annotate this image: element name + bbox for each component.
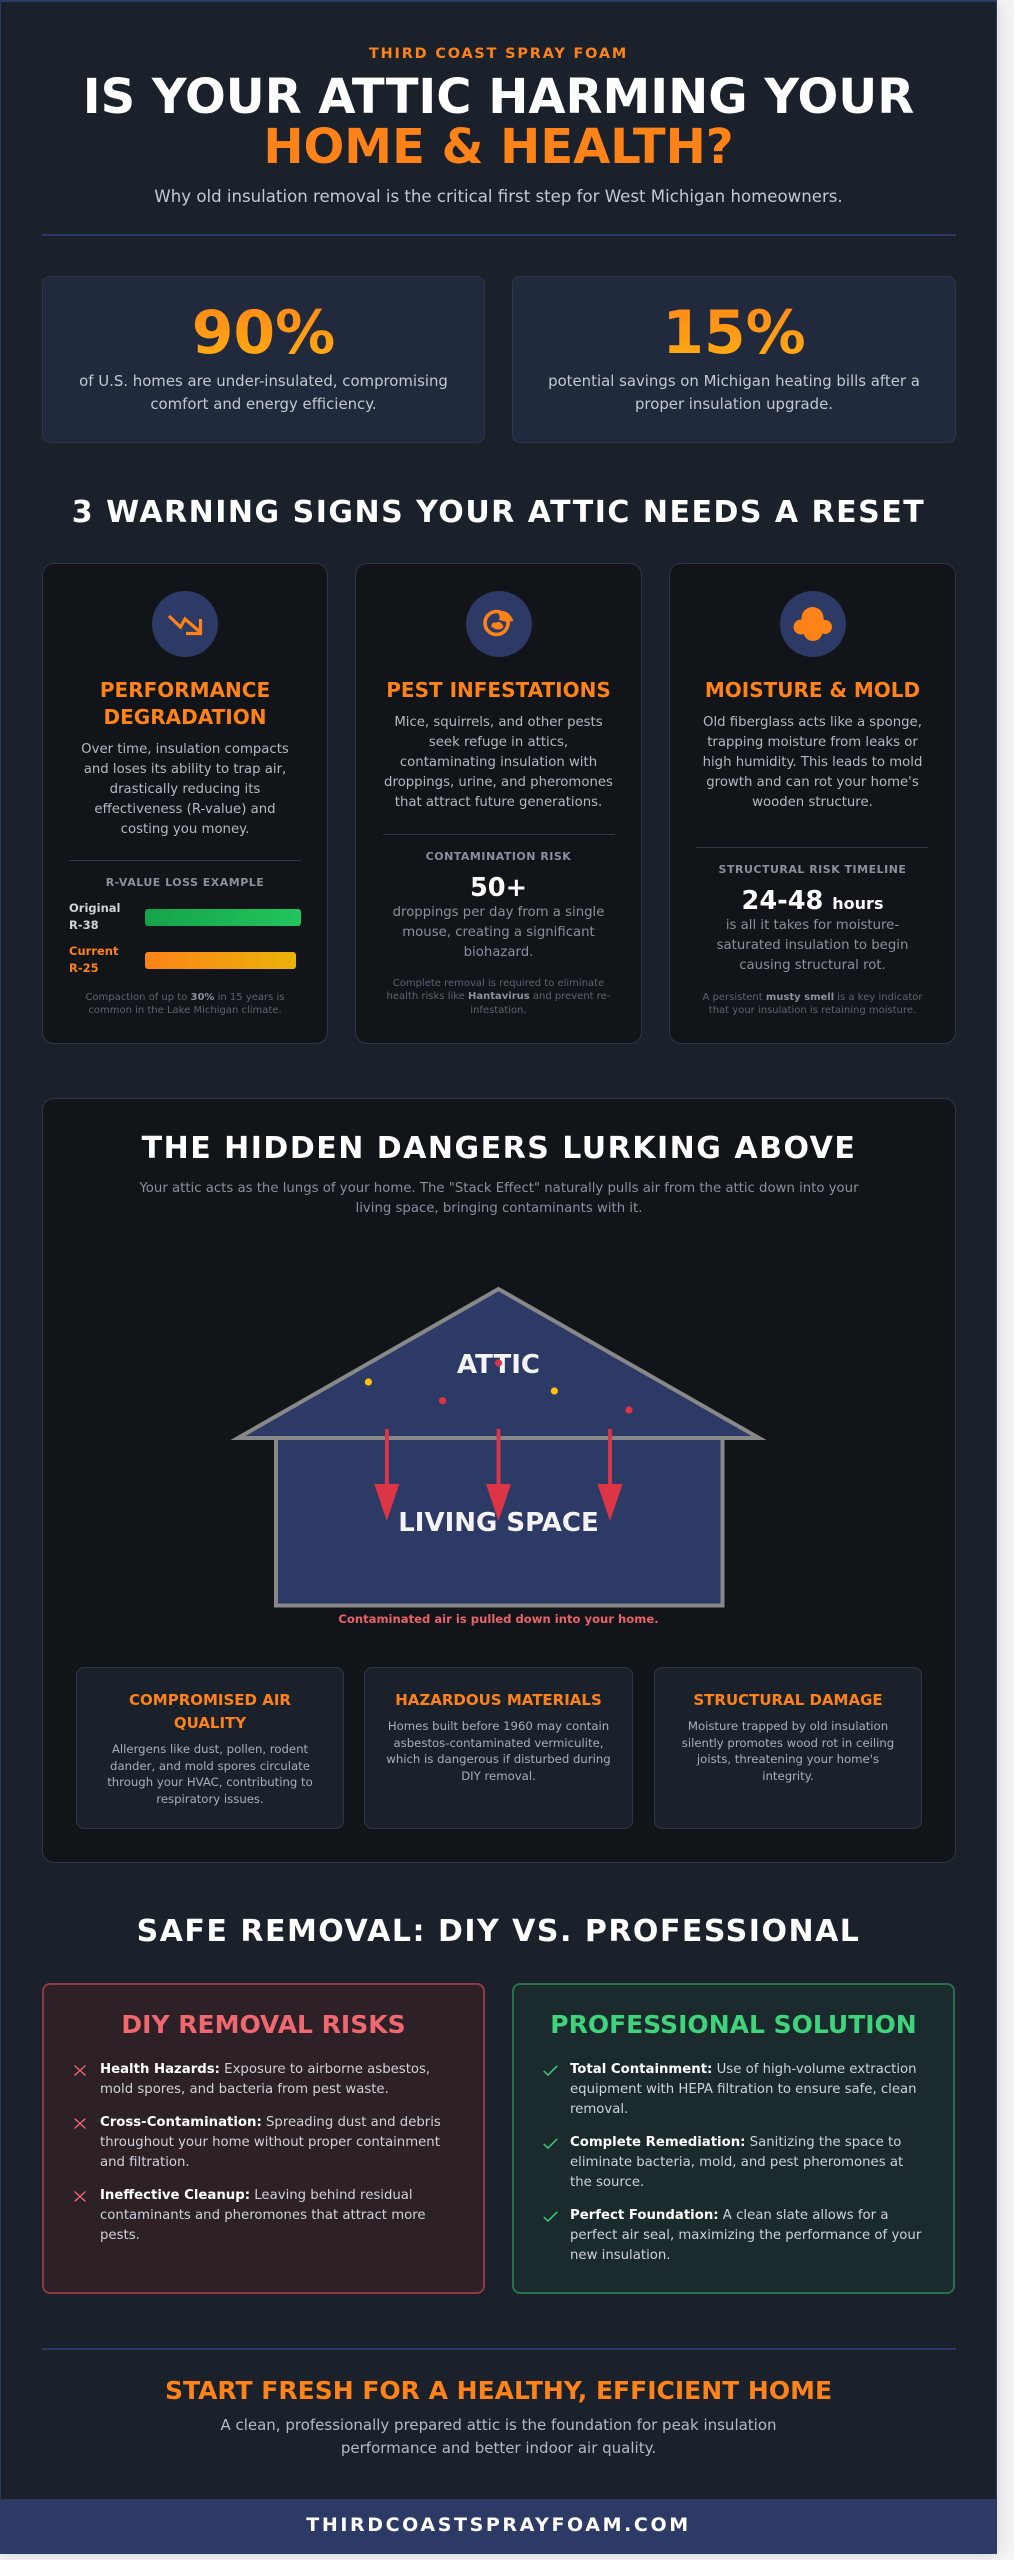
danger card: structural damage — [654, 1667, 922, 1829]
solution list — [543, 2062, 922, 2263]
section intro: living space, bringing contaminants with it. — [356, 1201, 642, 1216]
danger text — [386, 1719, 611, 1783]
risk: cross contamination: and filtration. — [100, 2155, 190, 2170]
danger text: dander, and mold spores circulate — [110, 1759, 310, 1773]
stat caption: causing structural rot. — [739, 958, 886, 973]
card text — [703, 715, 922, 810]
solution: total containment: equipment with HEPA filtration to ensure safe, clean — [570, 2082, 917, 2097]
solution: total containment — [570, 2062, 917, 2117]
call to action text: A clean, professionally prepared attic is the foundation for peak insulation — [220, 2416, 777, 2434]
card note: Complete removal is required to eliminate — [393, 978, 604, 989]
subtitle: Why old insulation removal is the critical first step for West Michigan homeowners. — [154, 187, 843, 206]
panel title: DIY REMOVAL RISKS — [121, 2010, 406, 2039]
section intro — [139, 1181, 859, 1216]
danger text: which is dangerous if disturbed during — [386, 1752, 611, 1766]
living space — [276, 1438, 722, 1606]
card note: health risks like Hantavirus and prevent re- — [387, 991, 610, 1002]
danger text — [682, 1719, 894, 1783]
card text: Mice, squirrels, and other pests — [394, 715, 603, 730]
icon: x — [74, 2118, 86, 2129]
risk: ineffective cleanup: contaminants and pheromones that attract more — [100, 2208, 426, 2223]
stat description: comfort and energy efficiency. — [150, 395, 377, 413]
stat description: of U.S. homes are under-insulated, compromising — [79, 372, 448, 390]
stat description: potential savings on Michigan heating bills after a — [548, 372, 920, 390]
card text: Over time, insulation compacts — [81, 742, 289, 757]
card title: PERFORMANCE — [100, 678, 270, 702]
card text: droppings, urine, and pheromones — [384, 775, 613, 790]
panel: DIY risks — [42, 1983, 485, 2294]
stat value: 50+ — [470, 873, 527, 903]
card title: PEST INFESTATIONS — [386, 678, 611, 702]
section intro: Your attic acts as the lungs of your home. The "Stack Effect" naturally pulls air from the attic down into your — [139, 1181, 859, 1196]
danger card: air quality — [76, 1667, 344, 1829]
label: current — [69, 944, 118, 975]
title: IS YOUR ATTIC HARMING YOUR — [83, 69, 914, 125]
call to action text — [0, 2414, 997, 2461]
icon: x — [74, 2065, 86, 2076]
card title: DEGRADATION — [104, 705, 266, 729]
risk: ineffective cleanup — [100, 2188, 426, 2243]
call to action text: performance and better indoor air quality. — [341, 2439, 656, 2457]
card text: contaminating insulation with — [400, 755, 597, 770]
card text: costing you money. — [121, 822, 249, 837]
living space label: LIVING SPACE — [398, 1508, 599, 1538]
roof attic — [238, 1289, 759, 1438]
icon: x — [74, 2191, 86, 2202]
arrow: center — [486, 1429, 511, 1521]
danger text: integrity. — [762, 1769, 814, 1783]
stat caption — [393, 905, 604, 960]
stat description: proper insulation upgrade. — [635, 395, 833, 413]
danger title: QUALITY — [174, 1714, 246, 1732]
icon: check — [543, 2211, 558, 2222]
arrow: left — [374, 1429, 399, 1521]
label: current: Current — [69, 944, 118, 958]
card text: effectiveness (R-value) and — [94, 802, 276, 817]
card text: and loses its ability to trap air, — [84, 762, 286, 777]
danger text: Moisture trapped by old insulation — [688, 1719, 888, 1733]
solution: perfect foundation: perfect air seal, maximizing the performance of your — [570, 2228, 921, 2243]
stat card: 15% — [512, 276, 956, 443]
solution: complete remediation: the source. — [570, 2175, 644, 2190]
stat caption: droppings per day from a single — [393, 905, 604, 920]
card text: high humidity. This leads to mold — [703, 755, 922, 770]
footer bar — [0, 2499, 997, 2554]
panel title: PROFESSIONAL SOLUTION — [550, 2010, 917, 2039]
label: original: R-38 — [69, 918, 99, 932]
contaminant particles — [365, 1359, 633, 1414]
card note: infestation. — [470, 1005, 527, 1016]
danger text: DIY removal. — [461, 1769, 536, 1783]
bar: original — [145, 909, 301, 926]
card title: MOISTURE & MOLD — [705, 678, 920, 702]
danger text: asbestos-contaminated vermiculite, — [394, 1736, 603, 1750]
icon: check — [543, 2138, 558, 2149]
risk: ineffective cleanup: Ineffective Cleanup: Leaving behind residual — [100, 2188, 413, 2203]
stat number: 90% — [192, 298, 335, 368]
card text: Old fiberglass acts like a sponge, — [703, 715, 922, 730]
heading: warning signs: 3 WARNING SIGNS YOUR ATTIC NEEDS A RESET — [72, 495, 925, 530]
panel: pest infestations — [355, 563, 642, 1044]
stat description — [79, 372, 448, 413]
card note — [702, 992, 922, 1016]
arrow: right — [598, 1429, 622, 1521]
icon: mold — [780, 591, 846, 657]
solution: perfect foundation: Perfect Foundation: A clean slate allows for a — [570, 2208, 888, 2223]
label: original — [69, 901, 120, 932]
risk: cross contamination — [100, 2115, 441, 2170]
card note — [387, 978, 610, 1016]
call to action heading: START FRESH FOR A HEALTHY, EFFICIENT HOME — [165, 2376, 832, 2405]
risk list — [74, 2062, 441, 2243]
card text: wooden structure. — [752, 795, 873, 810]
risk: health hazards — [100, 2062, 430, 2097]
card note: A persistent musty smell is a key indicator — [702, 992, 922, 1003]
solution: total containment: Total Containment: Use of high-volume extraction — [570, 2062, 917, 2077]
house diagram — [230, 1286, 766, 1626]
solution: perfect foundation: new insulation. — [570, 2248, 670, 2263]
panel: performance degradation — [42, 563, 328, 1044]
stat caption: saturated insulation to begin — [717, 938, 908, 953]
risk: cross contamination: Cross-Contamination: Spreading dust and debris — [100, 2115, 441, 2130]
card text — [81, 742, 289, 837]
danger text: Homes built before 1960 may contain — [388, 1719, 609, 1733]
panel: hidden dangers — [42, 1098, 956, 1863]
solution: complete remediation — [570, 2135, 903, 2190]
bar chart: r-value loss — [69, 901, 301, 975]
chart heading: R-VALUE LOSS EXAMPLE — [106, 876, 264, 889]
card title — [100, 678, 270, 729]
footer url: THIRDCOASTSPRAYFOAM.COM — [306, 2514, 691, 2536]
solution: perfect foundation — [570, 2208, 922, 2263]
icon: check — [543, 2065, 558, 2076]
stat description — [548, 372, 920, 413]
icon: trending down — [152, 591, 218, 657]
stat heading: CONTAMINATION RISK — [426, 850, 571, 863]
danger title: HAZARDOUS MATERIALS — [395, 1691, 602, 1709]
solution: complete remediation: Complete Remediation: Sanitizing the space to — [570, 2135, 901, 2150]
danger text: joists, threatening your home's — [697, 1752, 879, 1766]
danger text — [107, 1742, 313, 1806]
section heading: THE HIDDEN DANGERS LURKING ABOVE — [142, 1131, 856, 1166]
card note: common in the Lake Michigan climate. — [88, 1005, 282, 1016]
card note — [85, 992, 285, 1016]
icon: pest — [466, 591, 532, 657]
danger text: respiratory issues. — [156, 1792, 264, 1806]
panel: professional solution — [512, 1983, 955, 2294]
stat caption — [717, 918, 908, 973]
danger card: hazardous materials — [364, 1667, 633, 1829]
danger text: Allergens like dust, pollen, rodent — [112, 1742, 308, 1756]
title: HOME & HEALTH? — [263, 119, 734, 175]
stat heading: STRUCTURAL RISK TIMELINE — [719, 863, 906, 876]
solution: total containment: removal. — [570, 2102, 628, 2117]
stat caption: biohazard. — [464, 945, 533, 960]
stat value: 24-48 hours — [742, 886, 883, 916]
card text: growth and can rot your home's — [706, 775, 919, 790]
danger text: silently promotes wood rot in ceiling — [682, 1736, 894, 1750]
card note: Compaction of up to 30% in 15 years is — [85, 992, 285, 1003]
label: current: R-25 — [69, 961, 99, 975]
card text: seek refuge in attics, — [429, 735, 568, 750]
card note: that your insulation is retaining moisture. — [709, 1005, 916, 1016]
card text — [384, 715, 613, 810]
title — [83, 69, 914, 175]
eyebrow: brand name: THIRD COAST SPRAY FOAM — [369, 46, 628, 62]
stat caption: is all it takes for moisture- — [726, 918, 899, 933]
attic label: ATTIC — [457, 1350, 540, 1380]
risk: cross contamination: throughout your home without proper containment — [100, 2135, 440, 2150]
card text: that attract future generations. — [395, 795, 602, 810]
solution: complete remediation: eliminate bacteria, mold, and pest pheromones at — [570, 2155, 903, 2170]
risk: ineffective cleanup: pests. — [100, 2228, 140, 2243]
risk: health hazards: Health Hazards: Exposure to airborne asbestos, — [100, 2062, 430, 2077]
stat number: 15% — [662, 298, 806, 368]
card text: trapping moisture from leaks or — [707, 735, 918, 750]
heading: safe removal: SAFE REMOVAL: DIY VS. PROFESSIONAL — [137, 1914, 860, 1949]
diagram caption: Contaminated air is pulled down into your home. — [338, 1612, 659, 1626]
bar: current — [145, 952, 296, 969]
danger title — [129, 1691, 291, 1732]
danger title: STRUCTURAL DAMAGE — [693, 1691, 883, 1709]
stat caption: mouse, creating a significant — [402, 925, 595, 940]
card text: drastically reducing its — [110, 782, 260, 797]
stat card: 90% — [42, 276, 485, 443]
label: original: Original — [69, 901, 120, 915]
risk: health hazards: mold spores, and bacteria from pest waste. — [100, 2082, 389, 2097]
danger title: COMPROMISED AIR — [129, 1691, 291, 1709]
danger text: through your HVAC, contributing to — [107, 1775, 313, 1789]
panel: moisture and mold — [669, 563, 956, 1044]
